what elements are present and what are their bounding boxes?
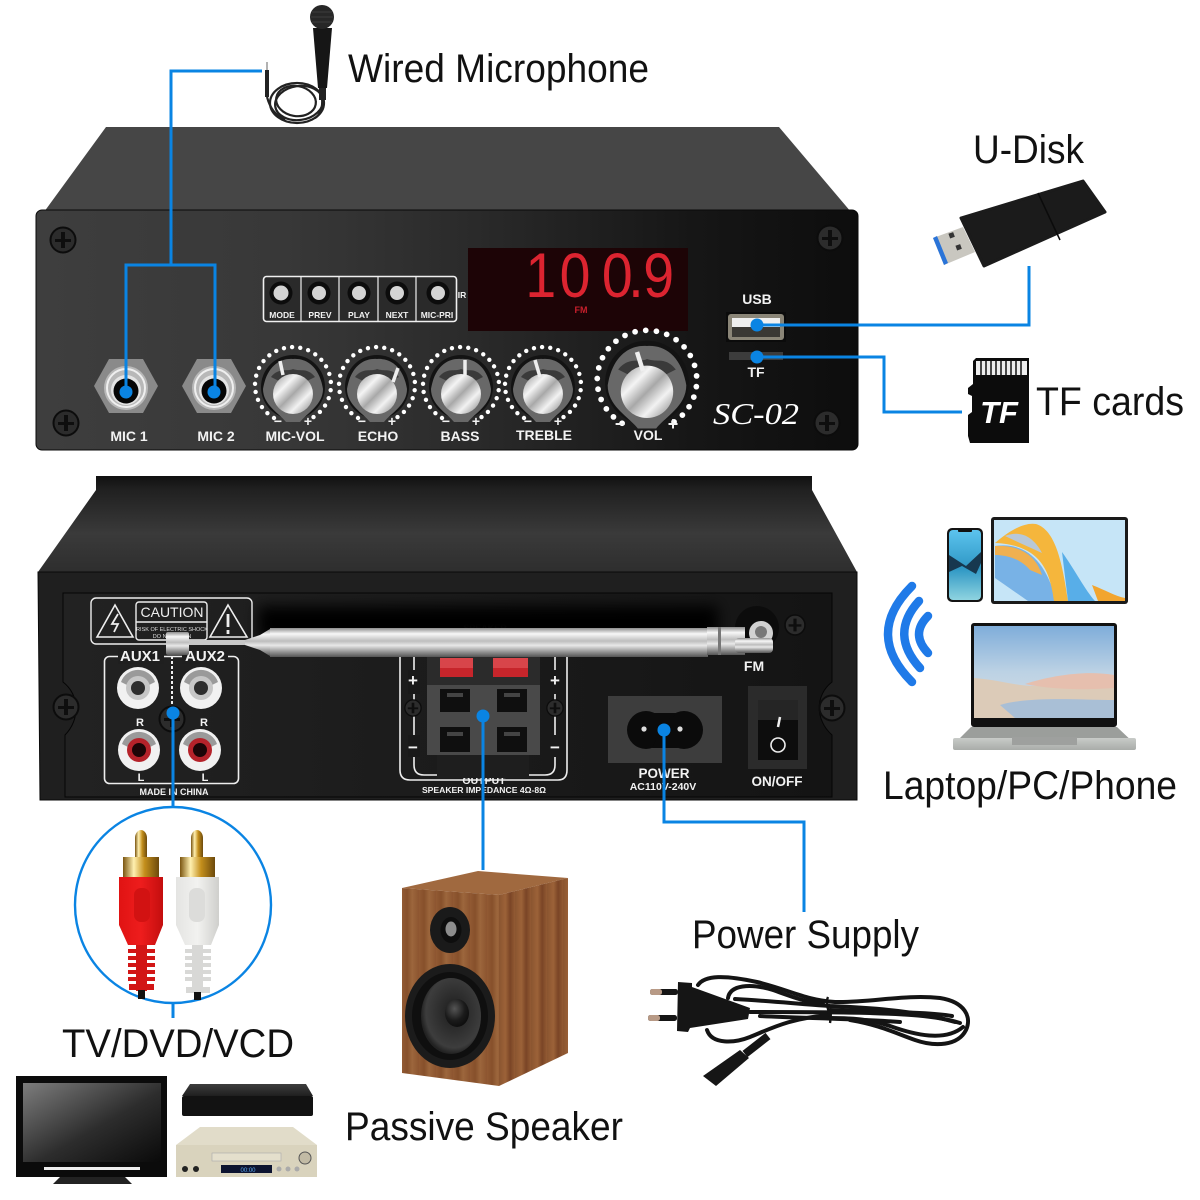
line: microphone to MIC inputs	[126, 71, 262, 392]
knob: MIC-VOL: −	[274, 413, 282, 429]
connection lines	[120, 71, 1029, 1018]
knob: VOL: +	[668, 414, 678, 434]
knob: BASS: BASS	[441, 428, 479, 444]
power cord	[648, 977, 968, 1086]
knob: MIC-VOL	[255, 347, 331, 444]
RCA plugs circle	[75, 807, 271, 1003]
microphone icon	[265, 5, 334, 123]
TF card icon	[968, 358, 1029, 443]
knob: VOL: VOL	[634, 427, 663, 443]
television	[16, 1076, 167, 1184]
heading: Power Supply: Power Supply	[692, 913, 919, 957]
knob: ECHO: ECHO	[358, 428, 398, 444]
heading: TV/DVD/VCD: TV/DVD/VCD	[62, 1022, 294, 1066]
phone	[947, 528, 983, 602]
power switch: ON/OFF	[752, 774, 802, 789]
LED display: 100.9	[525, 240, 674, 311]
mic jack 2: MIC 2	[197, 428, 235, 444]
line: inlet to power supply	[664, 730, 804, 912]
rear outer frame	[38, 572, 857, 800]
knob: ECHO: +	[388, 413, 396, 429]
VCD player silver	[176, 1127, 317, 1177]
speaker terminal block: SPEAKER IMPEDANCE 4Ω-8Ω	[422, 785, 546, 795]
USB port: USB	[742, 291, 772, 307]
knob: TREBLE: −	[524, 413, 532, 429]
red plug	[119, 830, 163, 999]
model name: SC-02	[713, 396, 799, 431]
LED display	[468, 240, 688, 331]
AUX input block: AUX2	[185, 648, 225, 665]
button strip: PLAY	[348, 310, 370, 320]
speaker cabinet	[402, 871, 568, 895]
line: AUX to RCA plugs	[172, 713, 174, 1018]
speaker section heading: SPEAKER	[463, 623, 507, 633]
knob: VOL: −	[615, 414, 625, 434]
laptop	[953, 623, 1136, 750]
speaker terminal block: +	[408, 671, 418, 690]
caution label: RISK OF ELECTRIC SHOCK	[136, 627, 208, 633]
AUX input block: AUX1	[120, 648, 160, 665]
button strip: MODE	[269, 310, 295, 320]
TF card icon: TF	[980, 395, 1019, 430]
AUX input block: L	[202, 772, 209, 784]
heading: Laptop/PC/Phone: Laptop/PC/Phone	[883, 764, 1177, 808]
icon: wireless waves	[888, 586, 928, 682]
AUX input block: L	[138, 772, 145, 784]
power switch	[748, 686, 807, 789]
speaker terminal block: OUTPUT	[462, 775, 506, 787]
power inlet: POWER	[638, 766, 690, 781]
AUX input block: R	[136, 717, 144, 729]
power inlet	[608, 696, 722, 793]
speaker terminal block	[400, 657, 567, 795]
line: terminal to passive speaker	[482, 716, 484, 870]
TF slot	[729, 352, 783, 380]
knob: MIC-VOL: +	[304, 413, 312, 429]
panel screws	[50, 226, 842, 436]
antenna shadow	[258, 606, 718, 640]
AUX input block	[104, 648, 238, 797]
side screws	[54, 615, 844, 720]
caution label: DO NOT OPEN	[153, 634, 191, 640]
knob: TREBLE: +	[554, 413, 562, 429]
mic jack 2	[182, 359, 246, 444]
woofer	[405, 964, 495, 1068]
knob: ECHO	[339, 347, 415, 444]
passive speaker	[402, 871, 568, 1086]
heading: U-Disk: U-Disk	[973, 128, 1085, 172]
LED display: FM	[574, 305, 588, 315]
knob: TREBLE	[505, 347, 581, 443]
line: TF card to slot	[757, 357, 962, 412]
speaker terminal block: −	[408, 738, 418, 757]
heading: TF cards: TF cards	[1036, 380, 1184, 424]
VCD player silver: 00:00	[240, 1168, 256, 1174]
rear inner panel	[63, 593, 832, 797]
knob: TREBLE: TREBLE	[516, 427, 572, 443]
knob: BASS: −	[442, 413, 450, 429]
front panel plate	[36, 210, 858, 450]
knob: BASS	[423, 347, 499, 444]
knob: BASS: +	[472, 413, 480, 429]
amplifier rear view	[38, 476, 857, 800]
mic jack 1: MIC 1	[110, 428, 148, 444]
power inlet: AC110V-240V	[630, 781, 696, 793]
DVD player black	[182, 1084, 313, 1116]
knob: ECHO: −	[358, 413, 366, 429]
button strip: NEXT	[386, 310, 409, 320]
button strip	[264, 276, 466, 322]
rear lid	[38, 476, 857, 572]
connection dots	[120, 318, 764, 736]
tablet	[991, 517, 1128, 604]
speaker terminal block: −	[550, 738, 560, 757]
speaker terminal block: +	[550, 671, 560, 690]
caution label	[91, 598, 252, 644]
heading: Passive Speaker: Passive Speaker	[345, 1105, 623, 1149]
mic jack 1	[94, 359, 158, 444]
AUX input block: MADE IN CHINA	[140, 787, 209, 797]
button strip: PREV	[308, 310, 332, 320]
TF slot: TF	[747, 364, 765, 380]
AUX input block: R	[200, 717, 208, 729]
FM antenna: FM	[744, 658, 764, 674]
tweeter	[430, 907, 470, 953]
button strip: IR	[458, 290, 466, 300]
knob: MIC-VOL: MIC-VOL	[265, 428, 325, 444]
U-disk icon	[933, 181, 1105, 266]
button strip: MIC-PRI	[421, 310, 453, 320]
amplifier lid	[44, 127, 851, 212]
line: U-disk to USB	[757, 266, 1029, 325]
caution label: CAUTION	[140, 604, 204, 620]
heading: Wired Microphone: Wired Microphone	[348, 47, 649, 91]
white plug	[176, 830, 219, 1000]
FM antenna	[166, 606, 779, 674]
knob: VOL	[597, 330, 697, 443]
USB port	[726, 291, 786, 342]
amplifier top view: front panel	[36, 127, 858, 450]
